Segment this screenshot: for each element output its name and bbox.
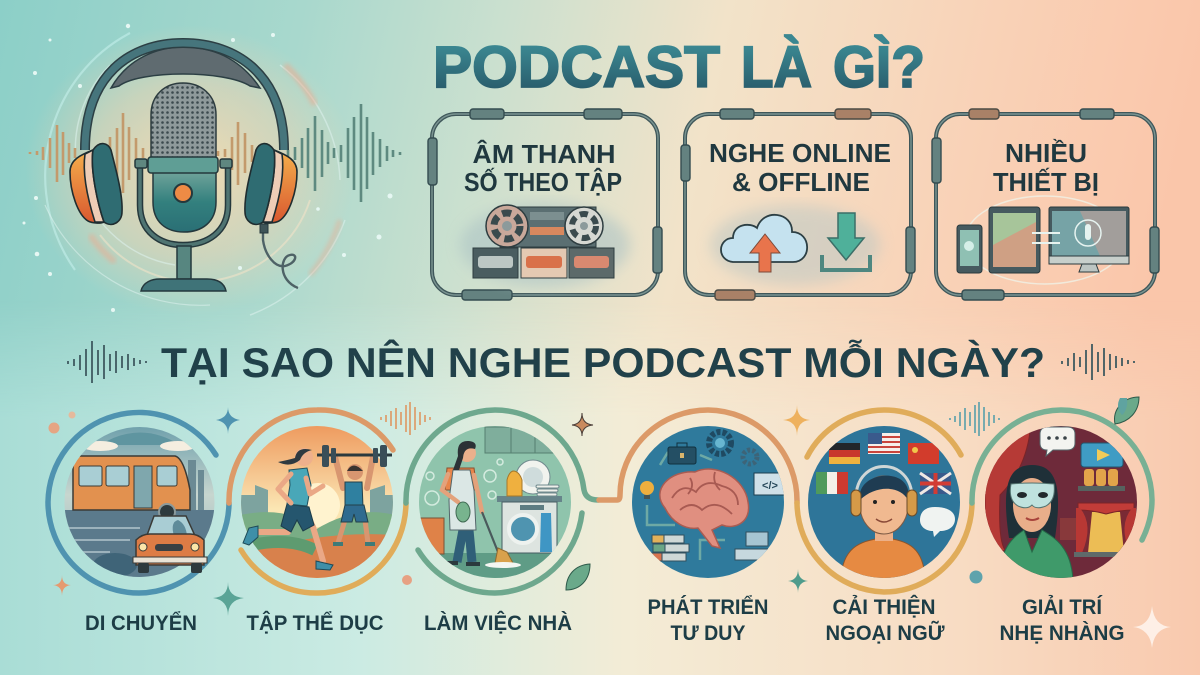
sound wave left	[30, 113, 252, 193]
icon: download	[822, 213, 870, 270]
card text: & OFFLINE	[732, 167, 870, 197]
microphone head	[151, 83, 216, 158]
headband	[85, 43, 284, 150]
label: GIẢI TRÍ	[1022, 596, 1103, 619]
scene: languages	[806, 425, 962, 582]
panel: nhieu thiet bi	[932, 109, 1159, 300]
microphone yoke	[140, 162, 228, 245]
title: podcast: GÌ?	[833, 35, 925, 100]
ring: bus	[48, 412, 229, 593]
ring: brain	[599, 410, 797, 503]
cable	[263, 233, 298, 288]
label: LÀM VIỆC NHÀ	[424, 611, 572, 635]
ring: languages	[797, 410, 972, 592]
label: NHẸ NHÀNG	[1000, 622, 1124, 645]
stars and dots	[48, 405, 1171, 648]
card text: THIẾT BỊ	[993, 167, 1099, 197]
label: TƯ DUY	[670, 622, 746, 645]
card text	[993, 138, 1099, 197]
runner	[243, 448, 333, 570]
label: CẢI THIỆN	[832, 595, 936, 619]
hero: microphone with headphones	[22, 24, 400, 315]
icon: cloud upload	[710, 205, 880, 285]
leaves top right	[1115, 397, 1139, 424]
sound wave right	[288, 104, 400, 202]
microphone body	[135, 157, 232, 232]
glow and sound rings	[22, 24, 392, 315]
scene: entertainment	[984, 425, 1140, 582]
ring: housework	[406, 410, 598, 593]
microphone stand	[141, 246, 226, 291]
cable frame	[428, 109, 662, 300]
card text: NGHE ONLINE	[709, 138, 891, 168]
panel: am thanh so theo tap	[428, 109, 662, 300]
ring: entertainment	[972, 410, 1152, 540]
heading: why listen: TẠI SAO NÊN NGHE PODCAST MỖI NGÀY?	[161, 338, 1045, 386]
scene: housework	[418, 425, 573, 580]
scene: bus and car	[60, 425, 220, 580]
decorative wave blue	[950, 402, 999, 436]
scene: brain: </>	[762, 480, 778, 492]
label: NGOẠI NGỮ	[826, 621, 945, 645]
title: podcast	[433, 35, 925, 100]
ear cup right	[245, 144, 297, 224]
decorative wave left of heading	[68, 341, 146, 383]
weightlifter	[317, 445, 392, 544]
card text	[464, 139, 622, 197]
panel: nghe online va offline	[681, 109, 915, 300]
ring: exercise	[229, 410, 406, 593]
decorative wave right of heading	[1062, 344, 1134, 380]
card text: ÂM THANH	[472, 139, 616, 169]
label: PHÁT TRIỂN	[648, 596, 768, 619]
title: podcast: LÀ	[741, 35, 812, 100]
scene: exercise	[240, 425, 395, 580]
title: podcast: PODCAST	[433, 35, 720, 100]
woman with mop	[442, 441, 521, 568]
cable frame	[681, 109, 915, 300]
ear cup left	[70, 144, 122, 224]
scene: brain	[630, 425, 786, 581]
icon: devices	[957, 196, 1129, 284]
card text: NHIỀU	[1005, 138, 1087, 168]
icon: tape deck	[460, 203, 630, 287]
label: DI CHUYỂN	[85, 612, 197, 635]
cable frame	[932, 109, 1159, 300]
card text	[709, 138, 891, 197]
decorative wave orange	[381, 402, 430, 435]
card text: SỐ THEO TẬP	[464, 167, 622, 197]
label: TẬP THỂ DỤC	[246, 611, 384, 635]
leaf near housework	[566, 564, 590, 590]
car	[133, 516, 207, 573]
